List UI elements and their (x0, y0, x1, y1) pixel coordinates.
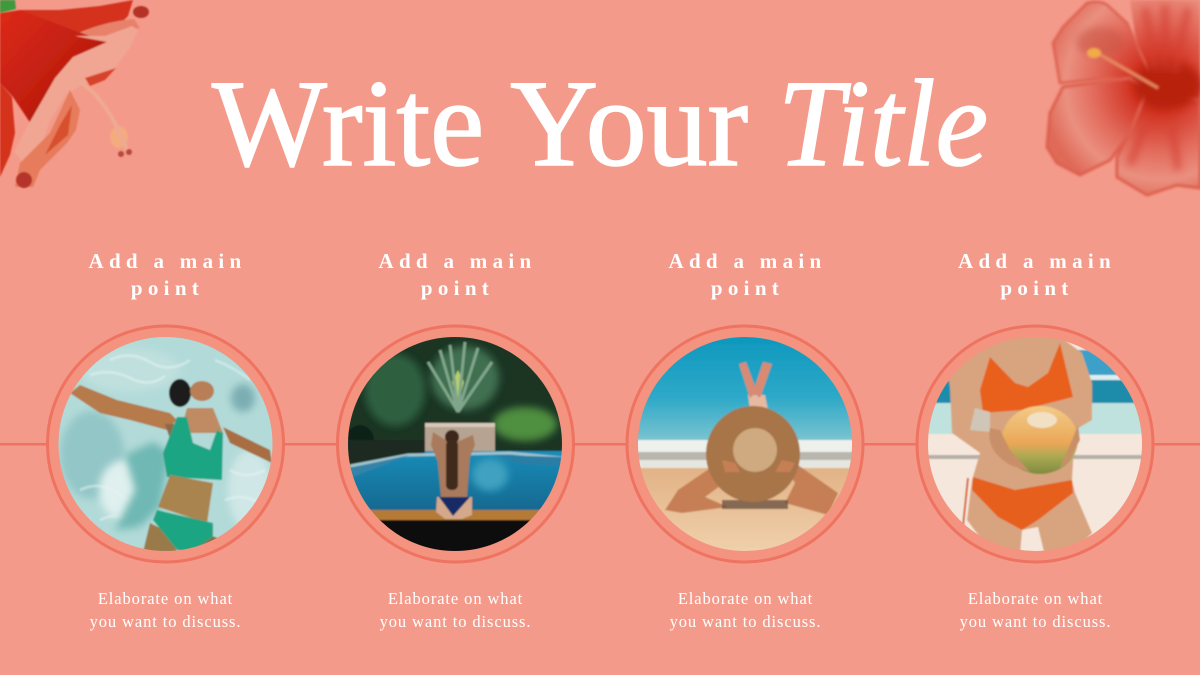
ring 4 (917, 326, 1153, 562)
description 1: you want to discuss. (90, 612, 241, 631)
description 2: Elaborate on what (388, 589, 523, 608)
heading 2: Add a main (378, 249, 537, 273)
column 4: main point, photo, description (917, 249, 1153, 631)
description 3: you want to discuss. (670, 612, 821, 631)
photo: woman floating in a pool (55, 335, 280, 555)
description 2: you want to discuss. (380, 612, 531, 631)
heading 1: point (131, 276, 204, 300)
column 1: main point, photo, description (48, 249, 284, 631)
heading 4: point (1000, 276, 1074, 300)
description 4: you want to discuss. (960, 612, 1111, 631)
heading 1: Add a main (88, 249, 247, 273)
photo: woman holding a coconut (925, 335, 1145, 556)
ring 3 (627, 326, 863, 562)
heading 3: point (711, 276, 784, 300)
description 1: Elaborate on what (98, 589, 233, 608)
column 2: main point, photo, description (338, 249, 574, 631)
description 4: Elaborate on what (968, 589, 1103, 608)
column 3: main point, photo, description (627, 249, 863, 631)
heading 3: Add a main (668, 249, 827, 273)
photo: woman in a sun hat on the beach (635, 335, 855, 556)
decorative hibiscus flower, top left (0, 0, 149, 188)
title: Write Your (212, 55, 748, 192)
connector line (0, 443, 1200, 446)
ring 1 (48, 326, 284, 562)
photo: woman sitting at a tropical pool (345, 335, 565, 555)
ring 2 (338, 326, 574, 562)
heading 4: Add a main (958, 249, 1116, 273)
description 3: Elaborate on what (678, 589, 813, 608)
title: Title (778, 55, 988, 192)
heading 2: point (421, 276, 494, 300)
decorative hibiscus flower, top right (1047, 0, 1200, 195)
